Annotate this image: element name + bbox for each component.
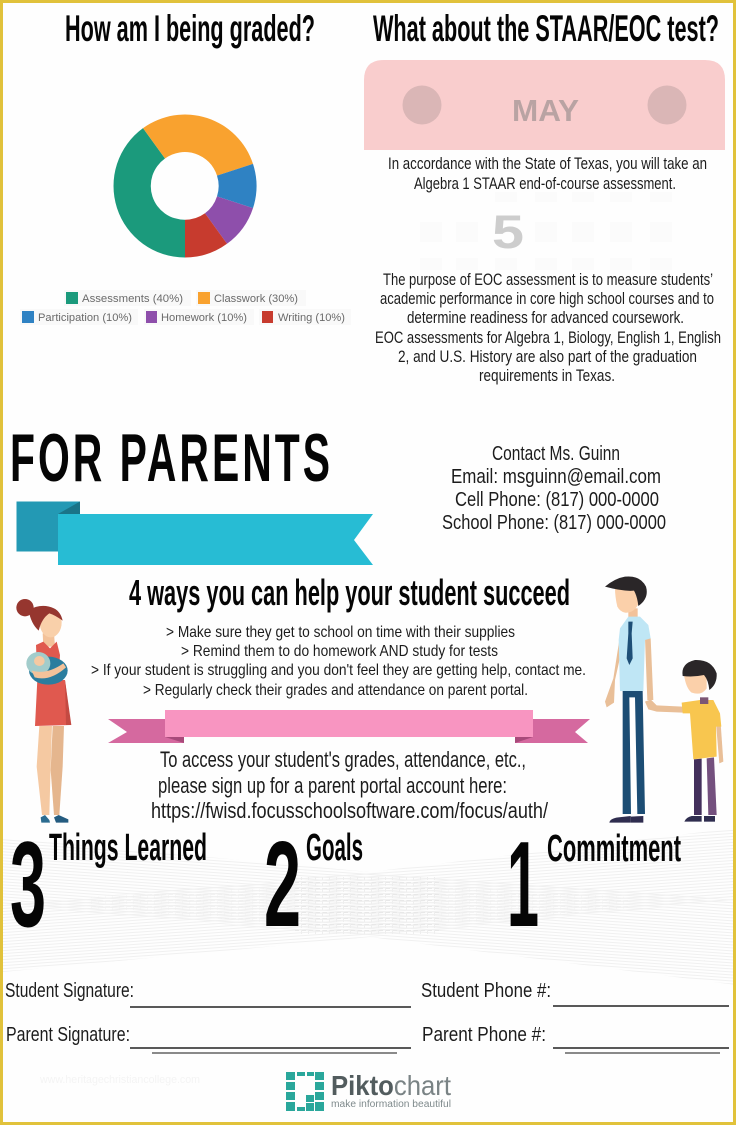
numeral 2 and Goals: 2 — [264, 816, 301, 952]
contact details: Contact Ms. Guinn — [492, 443, 620, 465]
signature fields — [5, 980, 729, 1053]
text block: parent portal — [151, 747, 549, 823]
chart legend: Homework (10%) — [161, 312, 247, 324]
chart legend: Assessments (40%) — [82, 293, 183, 305]
chart legend — [20, 290, 351, 325]
signature fields: Student Phone #: — [421, 980, 551, 1002]
numeral 3 and Things Learned — [10, 816, 207, 952]
numeral 1 and Commitment — [507, 816, 681, 952]
numeral 3 and Things Learned: Things Learned — [49, 827, 207, 869]
text block: parent portal: To access your student's grades, attendance, etc., — [160, 747, 526, 772]
contact details: Cell Phone: (817) 000-0000 — [455, 489, 659, 511]
signature fields: Parent Signature: — [6, 1024, 130, 1046]
chart legend: Classwork (30%) — [214, 293, 298, 305]
numeral 3 and Things Learned: 3 — [10, 816, 46, 952]
faint calendar date grid — [420, 192, 672, 270]
donut chart: grade weights — [114, 115, 257, 258]
numeral 1 and Commitment: 1 — [507, 816, 539, 952]
contact details: Email: msguinn@email.com — [451, 466, 661, 488]
text block: STAAR requirement — [388, 154, 707, 193]
calendar header: May — [364, 60, 725, 150]
illustration: father and son — [605, 576, 723, 823]
text block: EOC purpose: requirements in Texas. — [479, 366, 615, 385]
signature fields: Student Signature: — [5, 980, 134, 1002]
chart legend: Participation (10%) — [38, 312, 132, 324]
list: ways to help — [91, 624, 586, 699]
calendar date number: 5 — [492, 205, 524, 258]
faint watermark: www.heritagechristiancollege.com — [39, 1074, 200, 1086]
Piktochart logo: Piktochart — [331, 1070, 451, 1101]
text block: parent portal: https://fwisd.focusschoolsoftware.com/focus/auth/ — [151, 798, 549, 823]
chart legend: Writing (10%) — [278, 312, 345, 324]
numeral 2 and Goals: Goals — [306, 827, 363, 869]
heading: For Parents: FOR PARENTS — [10, 420, 333, 496]
signature fields: Parent Phone #: — [422, 1024, 546, 1046]
list: ways to help: > Remind them to do homework AND study for tests — [181, 643, 498, 660]
contact details — [442, 443, 666, 534]
illustration: mother holding baby — [16, 599, 71, 823]
pink ribbon — [108, 710, 590, 743]
numeral 2 and Goals — [264, 816, 363, 952]
list: ways to help: > If your student is struggling and you don't feel they are getting help, contact me. — [91, 662, 586, 679]
text block: EOC purpose — [375, 270, 721, 385]
Piktochart logo — [286, 1070, 451, 1111]
contact details: School Phone: (817) 000-0000 — [442, 512, 666, 534]
Piktochart logo: make information beautiful — [331, 1099, 451, 1110]
list: ways to help: > Regularly check their grades and attendance on parent portal. — [143, 682, 528, 699]
teal ribbon — [16, 502, 373, 565]
text block: parent portal: please sign up for a parent portal account here: — [158, 773, 507, 798]
moire line pattern background — [3, 828, 736, 985]
calendar header: May: MAY — [512, 93, 579, 128]
list: ways to help: > Make sure they get to school on time with their supplies — [166, 624, 515, 641]
heading: How am I being graded: How am I being graded? — [65, 8, 315, 49]
